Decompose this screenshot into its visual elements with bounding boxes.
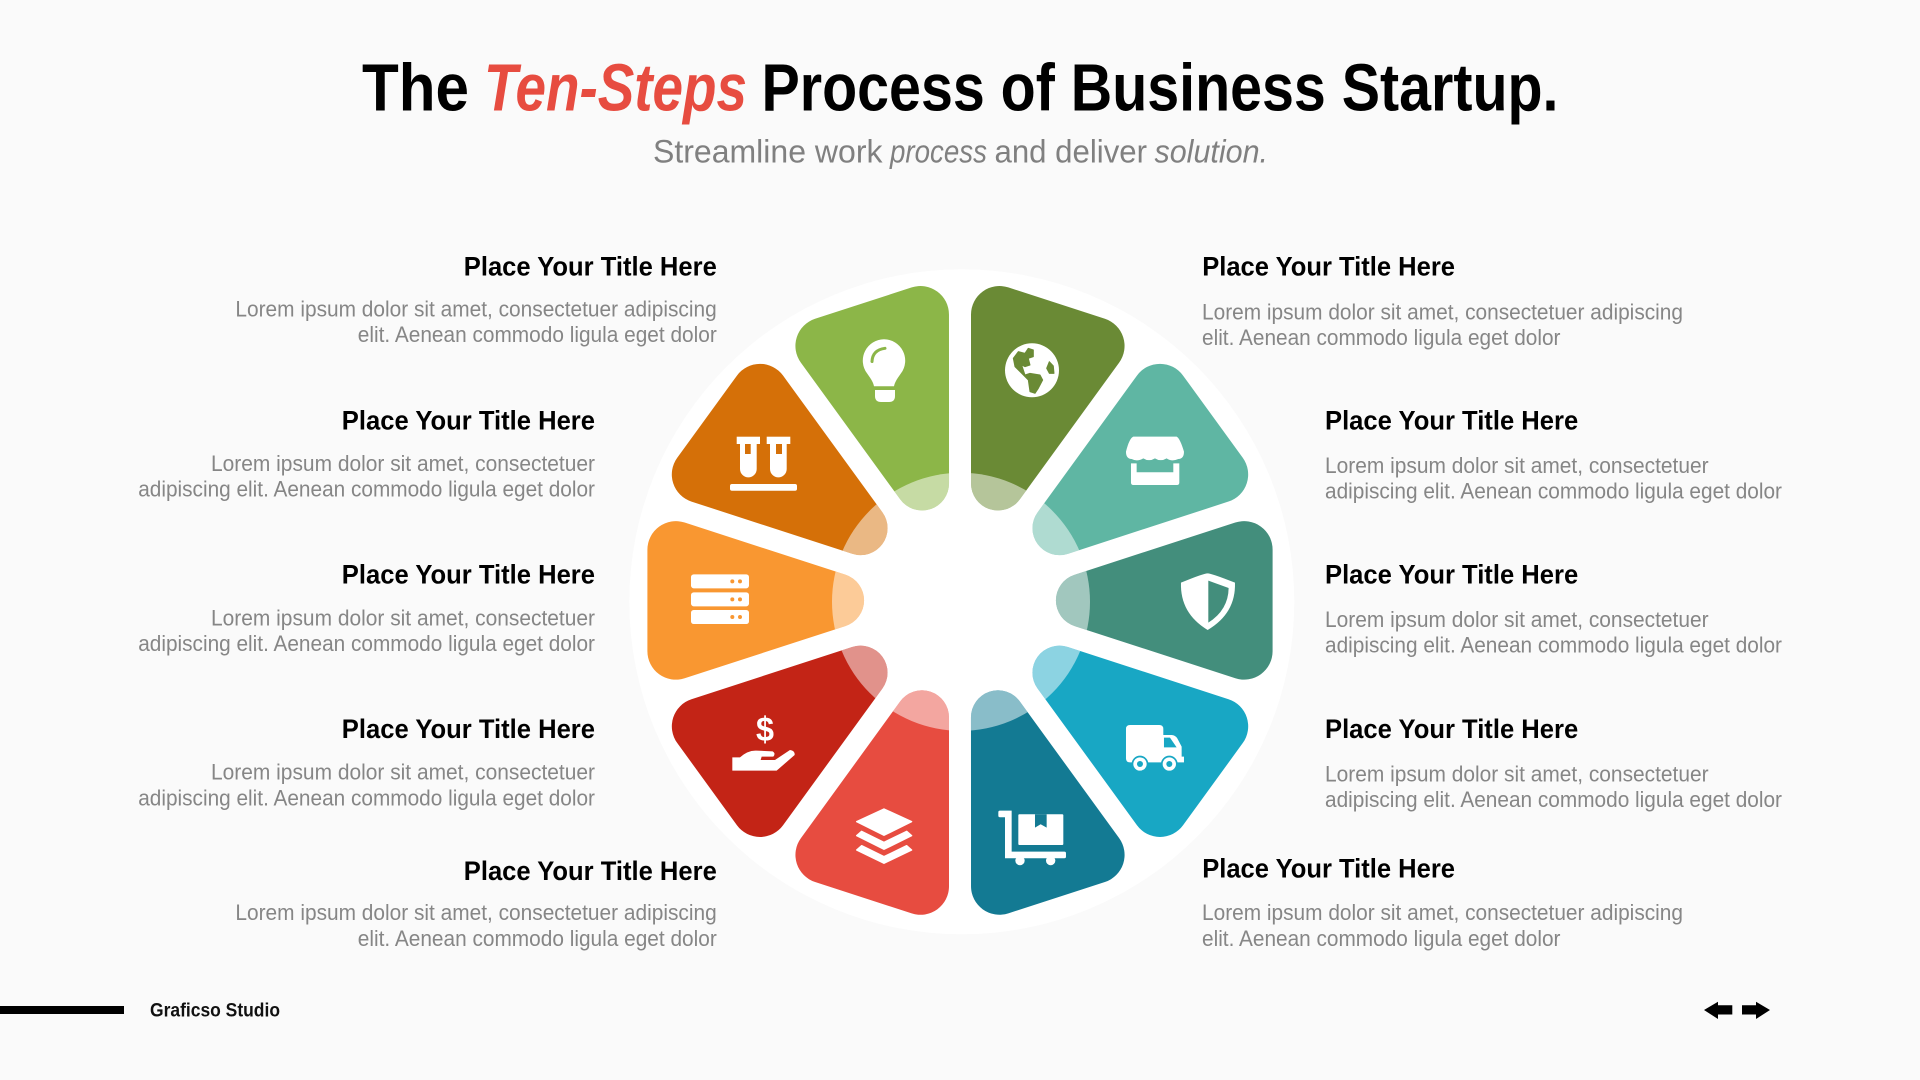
text block: left 3: Lorem ipsum dolor sit amet, consectetuer <box>211 605 595 630</box>
petal: deep green-teal <box>1049 514 1310 729</box>
arrow: next <box>1742 1002 1770 1019</box>
text block: left 4: adipiscing elit. Aenean commodo ligula eget dolor <box>138 785 595 810</box>
subtitle: Streamline work <box>653 134 884 170</box>
text block: right 3 <box>1325 560 1782 658</box>
title: Ten-Steps <box>484 51 747 126</box>
text block: right 3: Place Your Title Here <box>1325 560 1578 590</box>
text block: left 5: Lorem ipsum dolor sit amet, consectetuer adipiscing <box>235 900 717 925</box>
text block: left 4 <box>138 714 595 810</box>
text block: left 1: Place Your Title Here <box>464 252 717 282</box>
icon: test tubes <box>730 437 797 491</box>
petal: dark green <box>971 286 1125 511</box>
text block: left 3 <box>138 560 595 656</box>
text block: left 1: Lorem ipsum dolor sit amet, consectetuer adipiscing <box>235 297 717 322</box>
petal: dark orange <box>664 347 925 562</box>
translucent inner circle over petal tips <box>832 473 1090 731</box>
text block: right 4: Lorem ipsum dolor sit amet, consectetuer <box>1325 761 1709 786</box>
text block: right 2: adipiscing elit. Aenean commodo ligula eget dolor <box>1325 478 1782 503</box>
text block: left 5: Place Your Title Here <box>464 856 717 886</box>
icon: hand with dollar <box>732 711 795 771</box>
petal: green <box>784 249 1040 521</box>
subtitle: process <box>889 134 987 170</box>
text block: right 5: Place Your Title Here <box>1202 854 1455 884</box>
text block: left 4: Lorem ipsum dolor sit amet, consectetuer <box>211 760 595 785</box>
icon: delivery truck <box>1126 725 1184 772</box>
text block: left 4: Place Your Title Here <box>342 714 595 744</box>
petal: orange <box>610 472 871 687</box>
arrow: previous <box>1704 1002 1732 1019</box>
icon: light bulb <box>863 339 905 402</box>
title: The <box>362 51 469 126</box>
petal: teal <box>1022 353 1278 624</box>
text block: left 2 <box>138 405 595 502</box>
text block: right 1 <box>1202 252 1683 350</box>
icon: store <box>1126 437 1184 485</box>
subtitle <box>653 134 1268 170</box>
text block: right 2: Place Your Title Here <box>1325 405 1578 435</box>
text block: right 1: Place Your Title Here <box>1202 252 1455 282</box>
white circle behind wheel <box>629 269 1294 934</box>
text block: left 1: elit. Aenean commodo ligula eget dolor <box>358 322 717 347</box>
text block: left 3: Place Your Title Here <box>342 560 595 590</box>
text block: right 2 <box>1325 405 1782 503</box>
text block: right 5: elit. Aenean commodo ligula eget dolor <box>1202 926 1561 951</box>
text block: right 3: Lorem ipsum dolor sit amet, consectetuer <box>1325 607 1709 632</box>
subtitle: and deliver <box>994 134 1147 170</box>
subtitle: solution. <box>1154 134 1268 170</box>
petal: cyan <box>995 639 1256 854</box>
text block: left 1 <box>235 252 717 347</box>
text block: right 2: Lorem ipsum dolor sit amet, consectetuer <box>1325 453 1709 478</box>
icon: cart with box <box>998 811 1066 865</box>
title: Process of Business Startup. <box>762 51 1558 126</box>
text block: right 1: Lorem ipsum dolor sit amet, consectetuer adipiscing <box>1202 299 1683 324</box>
text block: right 5 <box>1202 854 1683 951</box>
icon: globe <box>1005 343 1059 397</box>
text block: right 4 <box>1325 714 1782 812</box>
footer bar <box>0 1006 124 1014</box>
icon: server <box>691 574 749 624</box>
text block: right 4: Place Your Title Here <box>1325 714 1578 744</box>
icon: layers <box>857 809 912 863</box>
icon: shield <box>1181 573 1235 630</box>
text block: left 2: Lorem ipsum dolor sit amet, consectetuer <box>211 451 595 476</box>
text block: right 1: elit. Aenean commodo ligula eget dolor <box>1202 325 1561 350</box>
petal: dark teal <box>880 680 1136 951</box>
text block: left 5: elit. Aenean commodo ligula eget dolor <box>358 926 717 951</box>
text block: left 2: Place Your Title Here <box>342 405 595 435</box>
text block: right 4: adipiscing elit. Aenean commodo ligula eget dolor <box>1325 787 1782 812</box>
text block: left 2: adipiscing elit. Aenean commodo ligula eget dolor <box>138 477 595 502</box>
petal: red <box>795 690 949 915</box>
text block: right 5: Lorem ipsum dolor sit amet, consectetuer adipiscing <box>1202 900 1683 925</box>
petal: dark red <box>642 576 898 848</box>
text block: left 3: adipiscing elit. Aenean commodo ligula eget dolor <box>138 631 595 656</box>
icon: hand with dollar: $ <box>756 711 774 749</box>
text block: right 3: adipiscing elit. Aenean commodo ligula eget dolor <box>1325 633 1782 658</box>
title <box>362 51 1558 126</box>
footer brand: Graficso Studio <box>150 1001 280 1022</box>
text block: left 5 <box>235 856 717 951</box>
